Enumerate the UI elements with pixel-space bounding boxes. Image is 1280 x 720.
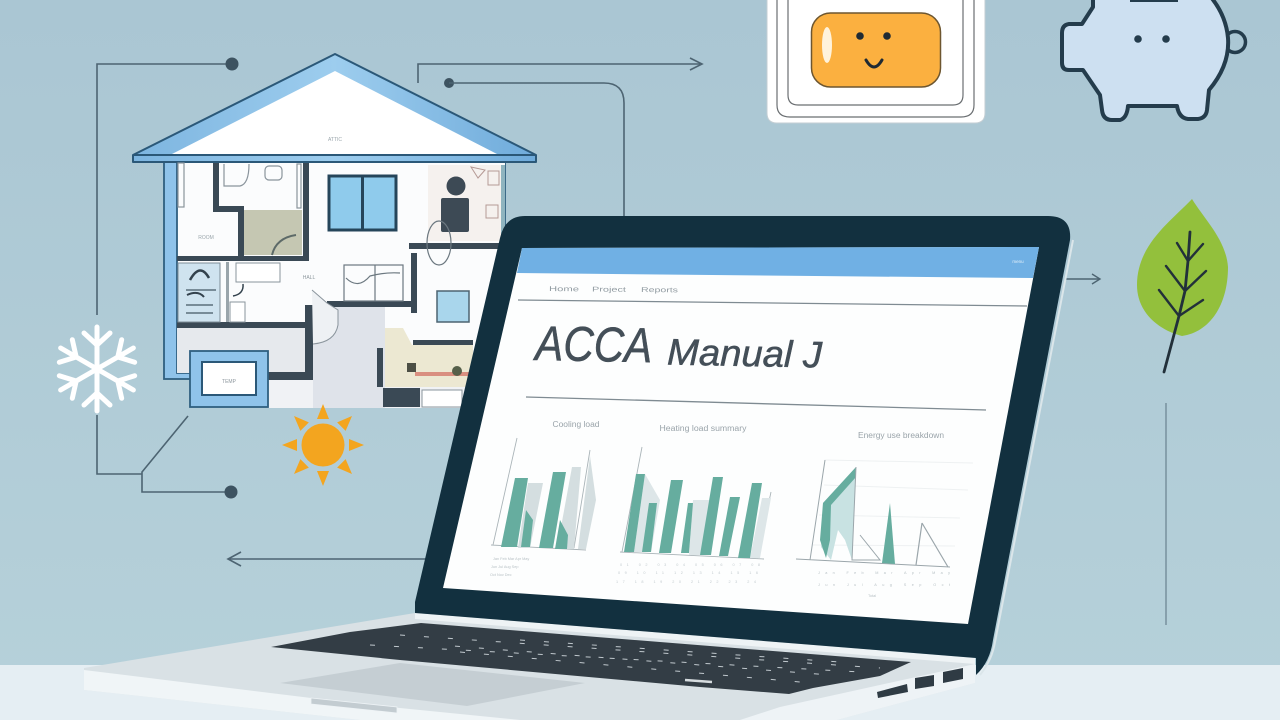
screen title: Manual J [667, 332, 823, 376]
icon: leaf [1137, 199, 1228, 372]
icon: piggy bank [1062, 0, 1246, 120]
label: hall: HALL [303, 275, 315, 281]
laptop base [84, 613, 975, 720]
area chart 3: Energy use breakdown [858, 431, 944, 440]
bar chart 1: Jun Jul Aug Sep [491, 565, 518, 569]
navigation text [549, 286, 679, 294]
navigation text: Home [549, 286, 579, 293]
wall fixtures [471, 167, 499, 218]
screen header bar [517, 247, 1039, 278]
icon: smart thermostat [767, 0, 985, 123]
front notch [311, 698, 397, 713]
connector line: top curved to laptop [444, 78, 624, 216]
laptop [84, 216, 1073, 720]
cabinet [344, 265, 403, 301]
area chart 3: Jan Feb Mar Apr May [818, 571, 950, 575]
title divider [526, 397, 986, 410]
house floor plan [133, 54, 536, 408]
arrow: laptop to leaf [1066, 274, 1100, 284]
keyboard [271, 623, 911, 694]
arrow: pointing left under house [228, 552, 427, 566]
trackpad [280, 663, 585, 706]
screen title [532, 317, 823, 377]
bar chart 1: Cooling load [552, 420, 600, 429]
window [329, 176, 396, 230]
door swing oval [427, 221, 451, 265]
small room thermostat: TEMP [222, 379, 237, 385]
vertical line under leaf [1165, 403, 1167, 625]
bar chart 2: 17 18 19 20 21 22 23 24 [616, 580, 756, 584]
icon: person [441, 176, 469, 232]
laptop screen [443, 247, 1039, 624]
desk surface [0, 665, 1280, 720]
interior walls [177, 163, 499, 407]
navigation text: Reports [641, 287, 679, 294]
nav divider [518, 300, 1027, 306]
bar chart 1: Oct Nov Dec [490, 573, 512, 577]
olive room [244, 210, 302, 255]
connector lines: left circuit [97, 58, 238, 498]
kitchen block [385, 328, 475, 407]
screen header bar: menu [1012, 259, 1024, 264]
door swing [312, 290, 338, 344]
laundry room [178, 262, 280, 322]
bar chart 2 [616, 424, 771, 584]
laptop lid [415, 216, 1070, 675]
house walls and floor [164, 160, 505, 379]
bar chart 1 [490, 420, 600, 577]
icon: sun [282, 404, 364, 486]
bathroom fixtures [178, 163, 301, 208]
area chart 3: Total [868, 594, 876, 598]
laptop lid edge highlight [980, 240, 1073, 675]
area chart 3 [796, 431, 973, 598]
bar chart 2: 09 10 11 12 13 14 15 16 [618, 571, 758, 575]
icon: snowflake [54, 327, 140, 411]
bar chart 2: 01 02 03 04 05 06 07 08 [620, 563, 760, 567]
navigation text: Project [592, 286, 626, 294]
small window [437, 291, 469, 322]
roof: ATTIC [328, 137, 342, 143]
area chart 3: Jun Jul Aug Sep Oct [818, 583, 951, 587]
roof [133, 54, 536, 162]
screen title: ACCA [532, 317, 653, 373]
bar chart 2: Heating load summary [660, 424, 746, 433]
side ports [877, 668, 963, 698]
small room thermostat [190, 351, 268, 407]
bar chart 1: Jan Feb Mar Apr May [493, 557, 529, 561]
arrow: top right connector [418, 58, 702, 83]
room label: ROOM [198, 235, 214, 241]
